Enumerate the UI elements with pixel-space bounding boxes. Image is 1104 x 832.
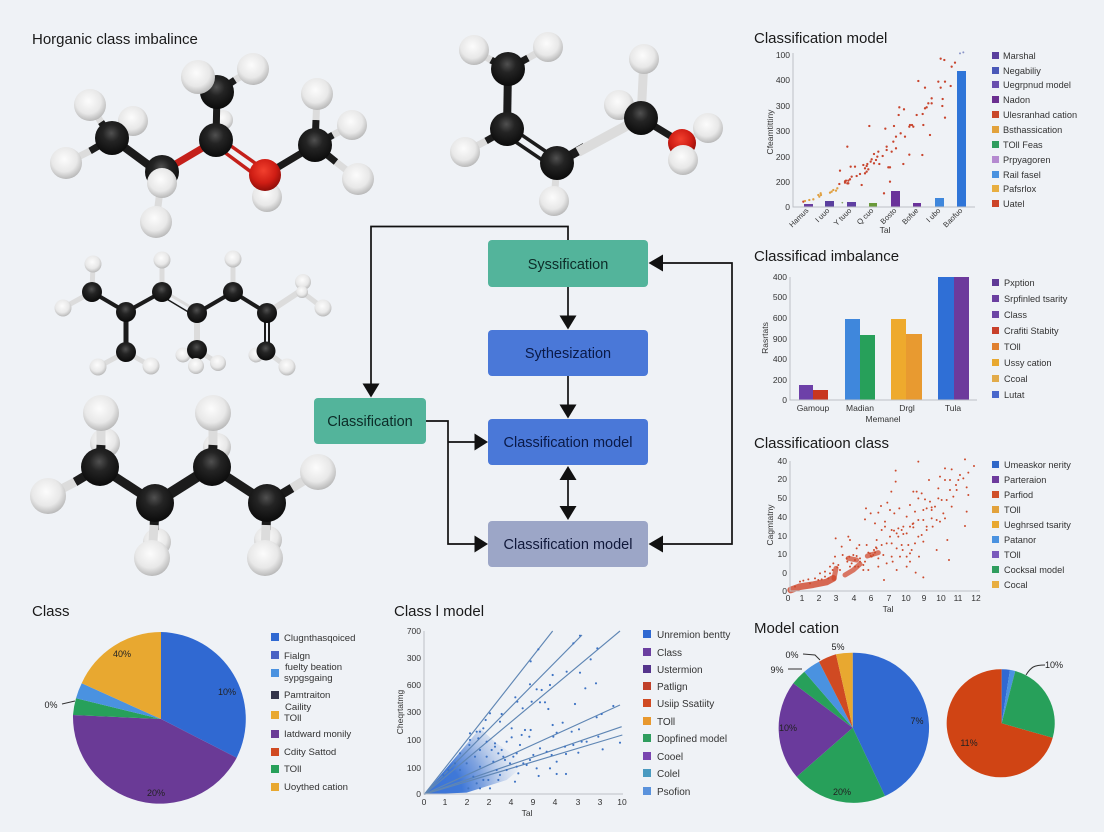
heading: Model cation [754,620,839,637]
legend: TOll [1004,550,1021,560]
slice labels: 0% [785,650,799,660]
y tick labels: 300 [776,126,790,136]
legend: Prpyagoren [1003,155,1050,165]
box: Classification model: Classification model [504,435,632,451]
legend: Ustermion [657,665,703,676]
legend: Cdity Sattod [284,747,336,758]
axes [790,277,977,400]
y tick labels [778,456,787,596]
box: Sythesization [488,330,648,376]
legend [992,278,1068,400]
legend: Bsthassication [1003,125,1062,135]
slice labels: 9% [770,665,784,675]
legend: Iatdward monily [284,729,351,740]
legend: Lutat [1004,390,1025,400]
slice labels: 10% [218,687,236,697]
pie [73,632,246,804]
slice labels: 10% [1045,660,1063,670]
slice labels [44,649,236,798]
legend: Pamtraiton [284,690,330,701]
y tick labels: 0 [416,789,421,799]
panel: Classificad imbalance chart [754,248,1068,424]
legend: Crafiti Stabity [1004,326,1059,336]
box: Classification: Classification [327,414,413,430]
y tick labels: 300 [776,101,790,111]
leader lines [788,654,1045,675]
y tick labels: 10 [778,531,787,541]
legend: TOll [1004,505,1021,515]
y tick labels [776,50,790,212]
slice labels: 7% [910,716,924,726]
y tick labels: 300 [407,707,421,717]
scatter points [803,52,963,203]
x tick labels: 4 [852,593,857,603]
box: Syssification: Syssification [528,257,608,273]
x tick labels: 2 [817,593,822,603]
y tick labels: 400 [776,75,790,85]
legend: Umeaskor nerity [1004,460,1071,470]
legend: TOll [284,713,301,724]
axis titles: Cfeamtittiny [765,109,775,154]
y tick labels: 400 [773,272,787,282]
x tick labels: Baofuo [941,206,964,229]
x tick labels: 2 [465,797,470,807]
y tick labels: 400 [773,354,787,364]
x tick labels: 10 [901,593,911,603]
x tick labels: 10 [936,593,946,603]
legend: Uoythed cation [284,782,348,793]
legend: Nadon [1003,95,1030,105]
legend: Cocksal model [1004,565,1064,575]
x tick labels: Cheqrtatmg [395,690,405,734]
legend: Clugnthasqoiced [284,633,355,644]
molecule: middle left [54,250,332,376]
x tick labels: Memanel [866,414,901,424]
legend: Cocal [1004,580,1028,590]
y tick labels: 100 [407,763,421,773]
x tick labels: Tal [522,808,533,818]
large pie [779,653,929,803]
slice labels: 0% [44,700,58,710]
y tick labels: 50 [778,493,787,503]
x tick labels [787,206,964,229]
legend: Caility [285,702,311,713]
y tick labels [773,272,787,405]
panel: Classification model chart [754,30,1077,235]
legend: Rail fasel [1003,170,1041,180]
x tick labels: 4 [509,797,514,807]
panel: Classificatioon class chart [754,435,1071,614]
legend [992,460,1071,590]
legend: fuelty beation [285,662,342,673]
legend: Parteraion [1004,475,1046,485]
legend: Class [1004,310,1027,320]
x tick labels: Drgl [899,403,915,413]
heading: Classification model [754,30,887,47]
legend: TOll [657,717,675,728]
x tick labels: 3 [576,797,581,807]
legend: Ccoal [1004,374,1028,384]
y tick labels: 200 [773,375,787,385]
slice labels: 40% [113,649,131,659]
legend: sypgsgaing [284,673,333,684]
y tick labels: 900 [773,334,787,344]
x tick labels: Tal [883,604,894,614]
y tick labels: 40 [778,456,787,466]
x tick labels [765,504,981,614]
y tick labels: 200 [776,152,790,162]
heading: Class [32,603,70,620]
y tick labels: 600 [773,313,787,323]
x tick labels: Hamus [787,206,811,229]
box: Syssification [488,240,648,287]
slice labels: 20% [833,787,851,797]
legend: Class [657,648,682,659]
legend: Dopfined model [657,734,727,745]
box: Classification model lower [488,521,648,567]
legend: Fialgn [284,651,310,662]
heading: Classificatioon class [754,435,889,452]
bars [799,277,969,400]
axes [790,461,980,591]
box: Classification model lower: Classification model [504,537,632,553]
legend: TOll [284,764,301,775]
y tick labels: 700 [407,626,421,636]
legend: Ussy cation [1004,358,1052,368]
x tick labels: 7 [887,593,892,603]
legend: Psofion [657,787,690,798]
x tick labels: 11 [954,593,963,603]
axes [793,53,975,207]
x tick labels: Q cuo [855,206,875,227]
legend [992,51,1077,209]
x tick labels: Rasrtats [760,322,770,354]
box: Classification model [488,419,648,465]
legend: Pafsrlox [1003,184,1037,194]
x tick labels: 2 [487,797,492,807]
x tick labels: 4 [553,797,558,807]
legend: Negabiliy [1003,66,1041,76]
x tick labels: 12 [971,593,981,603]
y tick labels: 0 [785,202,790,212]
x tick labels: Cagmtatny [765,504,775,546]
flowchart [314,226,732,567]
y tick labels: 500 [773,292,787,302]
axis titles [765,109,891,235]
legend: Usiip Ssatiity [657,699,714,710]
x tick labels: Gamoup [797,403,830,413]
y tick labels: 0 [782,568,787,578]
y tick labels: 300 [407,653,421,663]
panel: Model cation pie charts [754,620,1063,803]
heading: Classificad imbalance [754,248,899,265]
x tick labels: 0 [786,593,791,603]
legend [271,633,355,793]
legend: Marshal [1003,51,1036,61]
x tick labels [395,690,627,818]
x tick labels: 0 [422,797,427,807]
slice labels: 11% [960,738,978,748]
panel: Class l model chart [394,603,730,818]
title: Horganic class imbalince [32,31,198,48]
x tick labels: 1 [443,797,448,807]
legend: TOll [1004,342,1021,352]
y tick labels: 40 [778,512,787,522]
panel: Class pie chart [32,603,355,804]
molecule: top centre [450,32,723,216]
legend: Uegrpnud model [1003,80,1071,90]
axes [424,631,623,794]
molecule: top left [50,53,374,238]
legend: Unremion bentty [657,630,730,641]
small pie [947,669,1055,777]
legend: Uatel [1003,199,1024,209]
legend: Cooel [657,752,683,763]
y tick labels: 100 [407,735,421,745]
bars [804,71,966,207]
x tick labels: 3 [834,593,839,603]
x tick labels: Bofue [900,206,920,226]
legend: TOll Feas [1003,140,1043,150]
y tick labels: 200 [776,177,790,187]
x tick labels: Y tuuo [832,206,853,228]
axis titles: Tal [880,225,891,235]
x tick labels: 6 [869,593,874,603]
leader line [62,701,75,704]
x tick labels: Bosto [878,206,898,226]
slice labels: 20% [147,788,165,798]
x tick labels: Tula [945,403,961,413]
y tick labels: 10 [778,549,787,559]
x tick labels: I uuo [813,206,831,224]
legend: Patanor [1004,535,1036,545]
x tick labels: Madian [846,403,874,413]
legend: Parfiod [1004,490,1033,500]
legend: Pxption [1004,278,1035,288]
legend: Colel [657,769,680,780]
x tick labels [760,322,961,424]
y tick labels: 0 [782,586,787,596]
heading: Class l model [394,603,484,620]
y tick labels: 20 [778,474,787,484]
molecule: lower left [30,395,336,576]
box: Sythesization: Sythesization [525,346,611,362]
x tick labels: I ubo [924,206,942,224]
legend: Patlign [657,682,688,693]
y tick labels: 600 [407,680,421,690]
scatter points [791,459,974,590]
legend: Ulesranhad cation [1003,110,1077,120]
x tick labels: 9 [531,797,536,807]
y tick labels [407,626,421,799]
slice labels: 10% [779,723,797,733]
legend: Srpfinled tsarity [1004,294,1068,304]
connectors [362,226,732,552]
legend: Ueghrsed tsarity [1004,520,1071,530]
x tick labels: 9 [922,593,927,603]
y tick labels: 100 [776,50,790,60]
legend [643,630,730,798]
slice labels: 5% [831,642,845,652]
box: Classification [314,398,426,444]
x tick labels: 3 [598,797,603,807]
scatter and trend lines [424,631,622,794]
x tick labels: 1 [800,593,805,603]
x tick labels: 10 [617,797,627,807]
slice labels [770,642,1063,797]
y tick labels: 0 [782,395,787,405]
